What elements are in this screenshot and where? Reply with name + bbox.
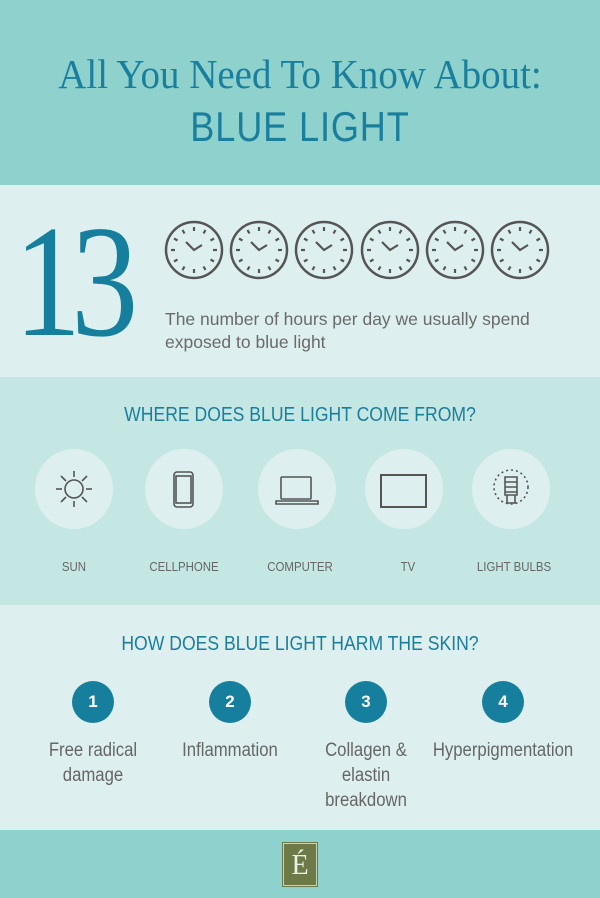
labels [62, 559, 551, 574]
labels: CELLPHONE [149, 559, 219, 574]
heading: HOW DOES BLUE LIGHT HARM THE SKIN? [121, 633, 479, 655]
numbered steps: 1 [88, 692, 98, 711]
icons [35, 449, 550, 529]
numbered steps: Inflammation [182, 740, 278, 761]
caption: The number of hours per day we usually spend [165, 309, 530, 329]
labels: SUN [62, 559, 86, 574]
heading: WHERE DOES BLUE LIGHT COME FROM? [124, 404, 476, 426]
clocks [164, 220, 550, 280]
labels: COMPUTER [267, 559, 333, 574]
numbered steps: 3 [361, 692, 371, 711]
labels: LIGHT BULBS [477, 559, 551, 574]
numbered steps: Collagen & [325, 740, 407, 761]
numbered steps: elastin [342, 765, 390, 786]
numbered steps: 4 [498, 692, 508, 711]
panel: harm [0, 605, 600, 830]
title line 1: All You Need To Know About: [58, 51, 542, 97]
numbered steps: Hyperpigmentation [433, 740, 573, 761]
caption [165, 309, 530, 352]
panel: 13 hours [0, 185, 600, 377]
numbered steps: 2 [225, 692, 235, 711]
panel: sources [0, 377, 600, 605]
logo [283, 843, 317, 886]
numbered steps: damage [63, 765, 123, 786]
numbered steps [49, 681, 573, 811]
logo: É [291, 850, 309, 881]
numbered steps: breakdown [325, 790, 407, 811]
big number 13: 13 [14, 192, 128, 370]
title line 2: BLUE LIGHT [190, 103, 410, 150]
labels: TV [401, 559, 415, 574]
numbered steps: Free radical [49, 740, 137, 761]
panel: header [0, 0, 600, 185]
panel: footer [0, 830, 600, 898]
caption: exposed to blue light [165, 332, 326, 352]
